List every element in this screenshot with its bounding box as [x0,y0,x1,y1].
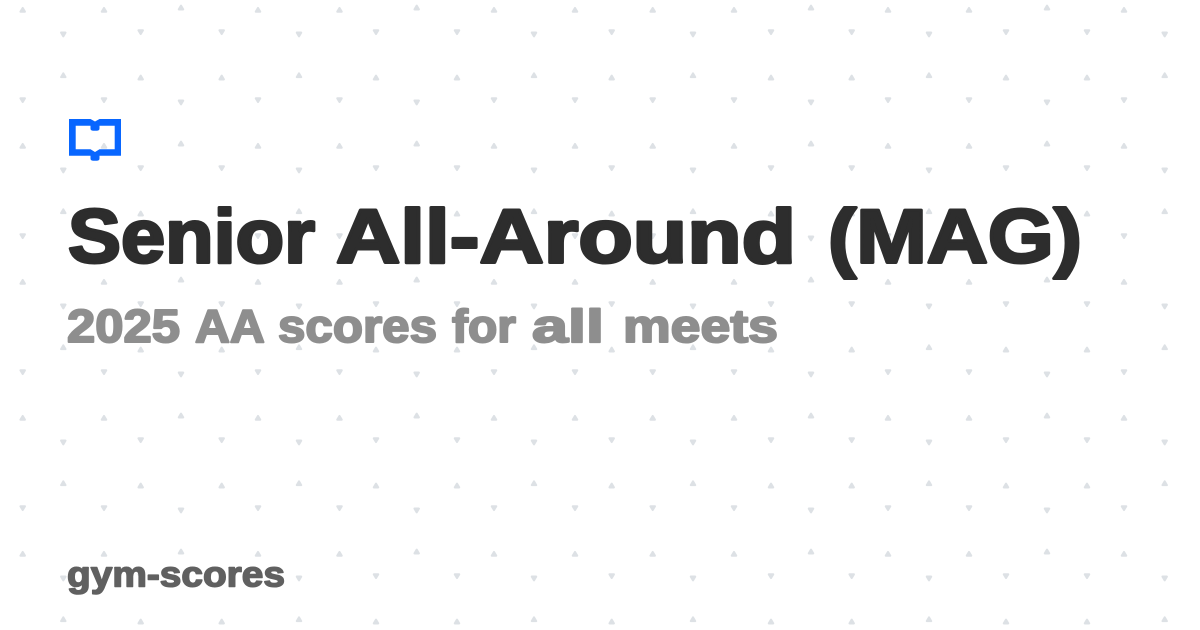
subtitle: AA [195,300,264,352]
subtitle: 2025 [67,300,180,352]
footer label: gym-scores: gym-scores [67,554,285,594]
subtitle: scores [278,300,437,352]
title: (MAG) [828,194,1082,280]
subtitle: all [532,300,604,352]
title: Senior [68,194,315,280]
subtitle: for [452,300,516,352]
icon: open book [69,119,121,161]
subtitle: meets [623,300,778,352]
title: All-Around [336,194,796,280]
